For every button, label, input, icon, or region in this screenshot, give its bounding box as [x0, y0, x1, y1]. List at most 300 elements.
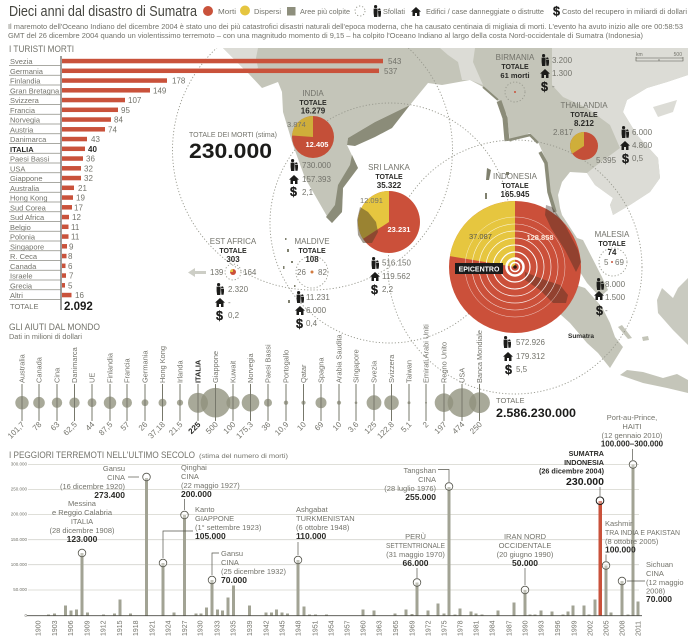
panel: Birmania: 1.300 [552, 69, 573, 78]
panel: Maldive: 0,4 [306, 319, 318, 328]
panel: Est Africa: $ [216, 309, 223, 323]
bubble chart: aid by country: Finlandia [106, 352, 114, 383]
callout: Ashgabat 1948: 110.000 [296, 531, 327, 541]
x axis years: 1903 [52, 620, 59, 636]
panel: Sri Lanka: 119.562 [382, 272, 411, 281]
bubble chart: aid by country: Kuwait [228, 361, 238, 383]
panel: Sri Lanka: 23.231 [388, 225, 410, 234]
x axis years: 1960 [360, 620, 368, 636]
panel: Malesia: 8.000 [605, 280, 626, 289]
bubble chart: aid by country: Norvegia [246, 353, 255, 383]
bubble chart: aid by country: Francia [122, 357, 132, 383]
island: Bangka [618, 325, 649, 341]
panel: India: 12.405 [306, 140, 328, 149]
panel: Birmania: BIRMANIA [496, 53, 535, 62]
bar chart: tourists dead: Altri [10, 291, 23, 300]
bubble chart: aid by country: 87,5 [97, 420, 115, 437]
panel: Birmania [496, 53, 573, 94]
bubble chart: aid by country: 37,18 [146, 420, 167, 441]
panel: Indonesia: 5,5 [516, 365, 528, 374]
callout: Gansu 1932: 70.000 [221, 575, 247, 585]
bar chart: tourists dead: Australia [10, 184, 40, 193]
panel: Sri Lanka: 516.150 [382, 258, 411, 268]
panel: Indonesia: 572.926 [516, 338, 545, 347]
bubble chart: aid by country: Canada [34, 356, 44, 383]
panel: Indonesia: 37.087 [469, 232, 492, 241]
x axis years: 1915 [117, 620, 124, 636]
legend [203, 4, 687, 18]
panel: Indonesia: 179.312 [516, 352, 545, 361]
x axis years: 1984 [490, 620, 496, 636]
scale bar: km [636, 52, 643, 58]
panel: India: 16.279 [301, 106, 326, 116]
legend: Sfollati [383, 9, 405, 16]
total deaths [189, 130, 277, 163]
x axis years: 1912 [100, 620, 108, 636]
heading: tourists: I TURISTI MORTI [9, 44, 74, 54]
callout: Ashgabat 1948 [296, 505, 355, 555]
bar chart: tourists dead: Polonia [10, 232, 36, 242]
callout: Iran 1990 [497, 532, 554, 585]
bubble chart: aid by country: 125 [363, 420, 379, 436]
bar chart: tourists dead: Svezia [10, 57, 33, 66]
callout: Sumatra 2004 [539, 449, 605, 496]
panel: Sri Lanka: TOTALE [375, 174, 403, 181]
x axis years: 2011 [636, 621, 642, 636]
bubble chart: aid by country: Hong Kong [158, 346, 167, 383]
callout: Iran 1990: OCCIDENTALE [499, 541, 551, 550]
callout: Gansu 1920: 273.400 [94, 490, 125, 500]
x axis years: 1969 [410, 620, 416, 636]
callout: Port-au-Prince 2010: Port-au-Prince, [607, 413, 657, 422]
x axis years: 1965 [393, 620, 400, 636]
callout: Messina 1908: Messina [68, 499, 97, 508]
callout: Qinghai 1927 [181, 463, 240, 510]
panel: Maldive: 11.231 [306, 293, 330, 302]
bar chart: tourists dead: USA [10, 164, 25, 173]
bubble chart: aid by country: Svezia [370, 360, 378, 383]
x axis years: 1999 [572, 620, 578, 636]
panel: Maldive: 82 [318, 268, 327, 277]
x axis years: 1935 [230, 620, 238, 636]
bar chart: tourists dead: 5 [68, 281, 73, 290]
x axis years: 1987 [506, 620, 514, 636]
callout: Gansu 1932: (25 dicembre 1932) [221, 567, 287, 576]
panel: Birmania: $ [541, 80, 548, 94]
y axis labels: 200.000 [11, 512, 27, 516]
x axis years: 1906 [68, 620, 75, 636]
map of the Indian Ocean [223, 48, 688, 393]
panel: Malesia: MALESIA [595, 230, 630, 239]
bar chart: tourists dead: 543 [388, 57, 402, 66]
callout: Sumatra 2004: INDONESIA [564, 458, 604, 467]
panel: Maldive: TOTALE [298, 248, 326, 255]
bar chart: tourists dead: Singapore [10, 242, 44, 251]
x axis years: 1900 [36, 620, 42, 636]
callout: Messina 1908: 123.000 [67, 534, 98, 544]
callout: Port-au-Prince 2010: HAITI [622, 422, 642, 431]
bar chart: tourists dead: 149 [153, 86, 167, 95]
legend: Morti [218, 9, 237, 16]
scale bar [636, 52, 683, 61]
bubble chart: aid by country: 500 [204, 420, 220, 436]
total deaths: TOTALE DEI MORTI (stima) [189, 130, 277, 139]
panel: Est Africa: 139 [210, 268, 224, 277]
panel: Thailandia: 0,5 [632, 154, 644, 163]
callout: Tangshan 1976: (28 luglio 1976) [384, 484, 437, 493]
bubble chart: aid by country [6, 324, 490, 441]
total tourists [10, 301, 93, 313]
bubble chart: aid by country: Banca Mondiale [475, 330, 484, 383]
bar chart: tourists dead: 537 [384, 67, 398, 76]
bar chart: tourists dead: 21 [78, 184, 87, 193]
bars [47, 464, 640, 616]
panel: Malesia: - [605, 306, 608, 315]
panel: Sri Lanka: 2,2 [382, 285, 394, 294]
label: Sumatra: Sumatra [568, 333, 594, 340]
bubble chart: aid by country: 225 [187, 420, 203, 436]
x axis years: 1948 [296, 620, 302, 636]
bar chart: tourists dead: 178 [172, 76, 186, 86]
panel: Maldive: 26 [297, 268, 306, 277]
bubble chart: aid by country: 5,1 [399, 420, 414, 434]
bubble chart: aid by country: 26 [137, 420, 150, 433]
callout: Tangshan 1976: 255.000 [405, 492, 436, 502]
total tourists: 2.092 [64, 301, 93, 313]
panel: Malesia: 69 [615, 258, 624, 267]
bar chart: tourists dead: 17 [74, 203, 83, 212]
bubble chart: aid by country: 57 [119, 420, 132, 433]
bar chart: tourists dead: Canada [10, 262, 37, 271]
y axis labels: 100.000 [11, 562, 27, 567]
bar chart: tourists dead: Sud Corea [10, 203, 47, 212]
panel: India: INDIA [302, 89, 324, 98]
island: Java [620, 370, 688, 393]
panel: Est Africa: 303 [226, 255, 240, 264]
panel: Sri Lanka: 12.091 [360, 196, 383, 205]
callout: Sumatra 2004: SUMATRA [569, 449, 604, 458]
legend: Aree più colpite [300, 9, 350, 16]
callout: Sichuan 2008 [627, 560, 684, 604]
x axis years [36, 620, 642, 636]
title: Dieci anni dal disastro di Sumatra [9, 3, 198, 20]
bar chart: tourists dead: 6 [68, 262, 73, 271]
panel: Thailandia: $ [622, 152, 629, 166]
callout: Kashmir 2005: Kashmir [605, 519, 633, 528]
callout: Iran 1990: (20 giugno 1990) [497, 550, 554, 559]
panel: Indonesia: 128.858 [526, 233, 554, 242]
callout: Messina 1908: (28 dicembre 1908) [49, 526, 115, 535]
displaced-people dashed circles [172, 10, 642, 394]
bubble chart: aid by country: Arabia Saudita [334, 334, 344, 383]
bar chart: tourists dead [9, 56, 402, 313]
bubble chart: aid by country: Portogallo [282, 350, 290, 383]
bubble chart: aid by country: 21,5 [167, 420, 185, 437]
bar chart: tourists dead: Hong Kong [10, 194, 48, 202]
heading: worst earthquakes: I PEGGIORI TERREMOTI NELL'ULTIMO SECOLO [9, 450, 195, 460]
panel: Indonesia: $ [505, 363, 512, 377]
intro text [8, 22, 683, 40]
x axis years: 1930 [198, 620, 204, 636]
legend: Dispersi [254, 9, 281, 16]
callout: Messina 1908: ITALIA [71, 517, 93, 526]
bubble chart: aid by country: Cina [52, 367, 62, 383]
x axis years: 2002 [588, 620, 594, 636]
bubble chart: aid by country: Germania [140, 350, 150, 383]
bubble chart: aid by country: Spagna [316, 357, 326, 383]
y axis labels: 150.000 [11, 537, 27, 542]
intro text: Il maremoto dell'Oceano Indiano del dicembre 2004 è stato uno dei più catastrofici disastri naturali dell'epoca moderna, che ha causato centinaia di migliaia di morti. L'evento ha avuto inizio alle ore 00:58:53 [8, 22, 683, 31]
island: Hainan [653, 100, 677, 117]
bubble chart: aid by country: Qatar [299, 364, 308, 383]
callout: Messina 1908: e Reggio Calabria [52, 508, 113, 517]
bubble chart: aid by country: Singapore [352, 349, 360, 383]
panel: Birmania: 3.200 [552, 56, 573, 65]
bar chart: tourists dead: 40 [88, 145, 97, 154]
arrow [188, 268, 206, 277]
panel: Malesia: 74 [608, 248, 617, 257]
legend: $ [553, 4, 560, 18]
bubble chart: aid by country: Danimarca [70, 346, 79, 383]
x axis years: 1957 [344, 620, 352, 636]
bar chart: tourists dead: Giappone [10, 174, 43, 183]
bar chart: tourists dead: Francia [10, 106, 36, 115]
callout: Peru 1970: SETTENTRIONALE [386, 541, 445, 550]
callout: Gansu 1920: CINA [107, 473, 125, 482]
bar chart: tourists dead: 19 [76, 194, 85, 202]
bubble chart: aid by country: 10,9 [273, 420, 291, 437]
total tourists: TOTALE [10, 302, 38, 311]
callout: Sichuan 2008: (12 maggio [646, 578, 684, 587]
panel: Est Africa [188, 237, 257, 323]
panel: India: 730.000 [302, 161, 331, 170]
bar chart: tourists dead: 36 [86, 154, 95, 164]
callout: Tangshan 1976: CINA [418, 475, 436, 484]
bubble chart: aid by country: 122,8 [375, 420, 396, 441]
x axis years: 1921 [150, 620, 156, 636]
panel: Birmania: 61 morti [500, 71, 530, 80]
callout: Kanto 1923 [163, 505, 262, 558]
callout: Kashmir 2005 [605, 519, 680, 561]
bar chart: tourists dead: 7 [69, 272, 74, 280]
bar chart: tourists dead: 84 [114, 116, 123, 124]
y axis labels: 300.000 [11, 462, 27, 466]
x axis years: 1933 [214, 620, 222, 636]
callout: Kashmir 2005: 100.000 [605, 544, 636, 554]
callout: Sumatra 2004: 230.000 [566, 476, 604, 488]
x axis years: 1993 [538, 620, 546, 636]
x axis years: 1981 [474, 620, 480, 636]
panel: Sri Lanka: 35.322 [377, 181, 402, 190]
panel: Sri Lanka: $ [371, 283, 378, 297]
panel: Est Africa: - [228, 298, 231, 307]
bubble chart: aid by country: 175,3 [234, 420, 255, 441]
bar chart: tourists dead: 74 [108, 125, 117, 134]
panel: Thailandia: 2.817 [553, 128, 574, 137]
callout: Kashmir 2005: TRA INDIA E PAKISTAN [605, 528, 680, 537]
bubble chart: aid by country: UE [88, 373, 96, 383]
bubble chart: aid by country: 197 [433, 420, 449, 436]
bubble chart: aid by country: 78 [31, 420, 44, 433]
bubble chart: aid by country: 3,6 [346, 420, 361, 434]
callout: Qinghai 1927: 200.000 [181, 489, 212, 499]
callout: Gansu 1932: Gansu [221, 549, 243, 558]
panel: Malesia: $ [596, 304, 603, 318]
bar chart: tourists dead: 16 [75, 291, 84, 300]
bar chart: tourists dead: Germania [10, 67, 44, 76]
panel: Est Africa: EST AFRICA [210, 237, 257, 246]
x axis years: 1996 [555, 620, 562, 636]
bubble chart: aid by country: 250 [468, 420, 484, 436]
heading: worst earthquakes: (stima del numero di morti) [199, 453, 288, 460]
x axis years: 1990 [522, 620, 530, 636]
bubble chart: aid by country: Paesi Bassi [264, 344, 272, 383]
callout: Port-au-Prince 2010: 100.000–300.000 [601, 440, 664, 448]
panel: Est Africa: 2.320 [228, 285, 249, 294]
bubble chart: aid by country: 100 [222, 420, 238, 436]
panel: Maldive: 6.000 [306, 306, 327, 315]
panel: Indonesia: INDONESIA [493, 172, 538, 181]
callout: Ashgabat 1948: (6 ottobre 1948) [296, 523, 350, 532]
bar chart: tourists dead: Grecia [10, 281, 33, 290]
callout: Gansu 1932 [212, 549, 287, 585]
bubble chart: aid by country: Irlanda [176, 360, 184, 383]
panel: India: 2,1 [302, 188, 314, 197]
callout: Tangshan 1976 [384, 466, 449, 502]
callout: Qinghai 1927: CINA [181, 472, 199, 481]
bar chart: tourists dead: Sud Africa [10, 213, 45, 222]
panel: Birmania: - [552, 82, 555, 91]
callout: Port-au-Prince 2010 [601, 413, 664, 460]
bubble chart: aid by country: 2 [421, 420, 431, 430]
panel: Indonesia: TOTALE [501, 183, 529, 190]
bar chart: tourists dead: 107 [128, 96, 142, 105]
bubble chart: aid by country: 474 [451, 420, 467, 436]
bubble chart: aid by country: Giappone [211, 351, 220, 383]
panel: Thailandia: THAILANDIA [560, 101, 608, 110]
x axis years: 1945 [280, 620, 286, 636]
panel: Sri Lanka: SRI LANKA [368, 163, 411, 172]
callout: Gansu 1920: (16 dicembre 1920) [60, 482, 125, 491]
callout: Gansu 1932: CINA [221, 558, 239, 567]
panel: Thailandia: TOTALE [570, 112, 598, 119]
panel: Indonesia: 165.945 [501, 190, 530, 199]
x axis years: 1963 [376, 620, 384, 636]
panel: Thailandia: 5.395 [596, 156, 617, 165]
callout: Kanto 1923: Kanto [195, 505, 215, 514]
x axis years: 1939 [247, 620, 254, 636]
bar chart: tourists dead: R. Ceca [10, 252, 38, 261]
bubble chart: aid by country: Taiwan [404, 360, 414, 383]
legend: Costo del recupero in miliardi di dollari [562, 9, 687, 16]
bubble chart: aid by country: 10 [295, 420, 308, 433]
peak markers [78, 461, 637, 594]
x axis years: 1942 [264, 620, 270, 636]
bubble chart: aid by country: Regno Unito [440, 342, 448, 383]
panel: Thailandia: 6.000 [632, 128, 653, 137]
callout: Tangshan 1976: Tangshan [403, 466, 436, 475]
panel: India: TOTALE [299, 100, 327, 107]
callout: Gansu 1920 [60, 464, 139, 500]
bubble chart: aid by country: 62,5 [62, 420, 79, 437]
panel: Malesia [594, 230, 630, 318]
epicentre label [455, 263, 503, 274]
total aid [496, 396, 576, 420]
legend: Edifici / case danneggiate o distrutte [426, 9, 544, 16]
x axis years: 2005 [604, 620, 610, 636]
panel: Thailandia [553, 101, 653, 166]
x axis years: 1927 [182, 620, 189, 636]
panel: Maldive: $ [296, 317, 303, 331]
panel: Est Africa: TOTALE [219, 248, 247, 255]
island: Sumatra [535, 268, 623, 368]
epicentre label: EPICENTRO [459, 266, 500, 274]
x axis years: 1918 [133, 620, 140, 636]
bubble chart: aid by country: 36 [260, 420, 273, 433]
callout: Kanto 1923: (1° settembre 1923) [195, 523, 262, 532]
scale bar: 500 [674, 52, 682, 58]
callout: Sichuan 2008: Sichuan [646, 560, 673, 569]
callout: Sichuan 2008: 2008) [646, 586, 666, 596]
panel: Malesia: TOTALE [598, 241, 626, 248]
panel: Malesia: 5 [604, 258, 609, 267]
bar chart: tourists dead: 8 [68, 252, 73, 261]
callout: Kashmir 2005: (8 ottobre 2005) [605, 537, 659, 546]
y axis labels: 50.000 [13, 587, 27, 592]
callout: Peru 1970: (31 maggio 1970) [386, 550, 445, 559]
bar chart: tourists dead: Paesi Bassi [10, 154, 50, 164]
bubble chart: aid by country: USA [458, 368, 466, 383]
callout: Ashgabat 1948: TURKMENISTAN [296, 514, 355, 523]
callout: Sichuan 2008: 70.000 [646, 594, 672, 604]
panel: Thailandia: 8.212 [574, 119, 595, 128]
heading: world aid: Dati in milioni di dollari [9, 334, 82, 341]
callout: Peru 1970 [386, 532, 445, 578]
panel: Maldive: 108 [305, 255, 319, 264]
bar chart: tourists dead: 32 [84, 164, 93, 173]
total aid: TOTALE [496, 396, 524, 405]
panel: Maldive [294, 237, 330, 331]
bar chart: tourists dead: Austria [10, 125, 34, 134]
y axis labels [11, 462, 27, 618]
callout: Kanto 1923: 105.000 [195, 531, 226, 541]
x axis years: 1978 [458, 620, 464, 636]
bubble chart: aid by country: 44 [84, 420, 97, 433]
bubble chart: aid by country: 69 [313, 420, 326, 433]
bar chart: tourists dead: 11 [71, 223, 80, 232]
bar chart: tourists dead: Israele [10, 272, 33, 280]
callout: Messina 1908 [49, 499, 115, 544]
panel: India: $ [290, 185, 297, 199]
panel: Indonesia [449, 172, 581, 377]
callout: Peru 1970: 66.000 [402, 558, 429, 568]
callout: Iran 1990: 50.000 [512, 558, 538, 568]
callout: Iran 1990: IRAN NORD [504, 532, 547, 541]
panel: Est Africa: 0,2 [228, 311, 240, 320]
bar chart: tourists dead: 32 [84, 174, 93, 183]
x axis years: 1909 [84, 620, 92, 636]
panel: Sri Lanka [357, 163, 420, 297]
bar chart: tourists dead: Gran Bretagna [10, 86, 60, 95]
x axis years: 1924 [166, 620, 172, 636]
panel: India: 3.874 [287, 120, 306, 129]
highlighted bar: Sumatra 2004 [598, 501, 602, 616]
bar chart: tourists dead: 9 [69, 242, 74, 251]
x axis years: 2008 [620, 620, 626, 636]
panel: Birmania: TOTALE [501, 64, 529, 71]
bar chart: tourists dead: Norvegia [10, 116, 41, 124]
x axis years: 1975 [442, 620, 448, 636]
